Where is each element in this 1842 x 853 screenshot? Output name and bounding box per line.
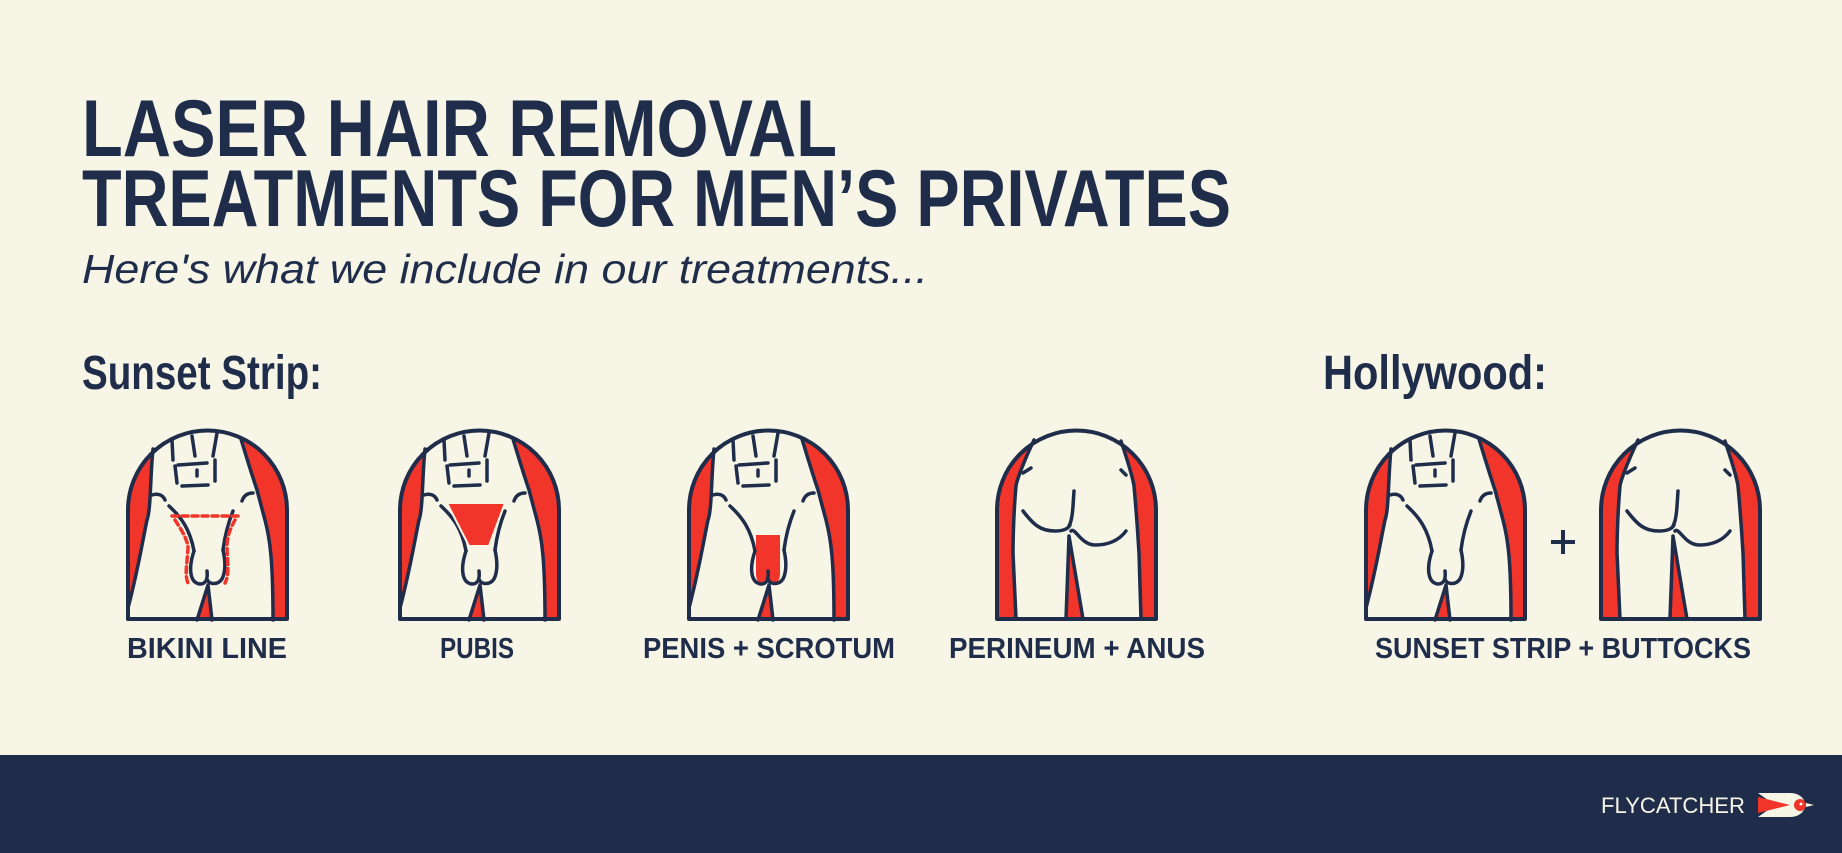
icon: bikini line [126,429,289,620]
title [82,84,1231,244]
label: perineum + anus: PERINEUM + ANUS [949,633,1205,665]
heading: Sunset Strip: Sunset Strip: [82,347,322,400]
subtitle: Here's what we include in our treatments... [82,246,928,292]
label: sunset strip + buttocks: SUNSET STRIP + BUTTOCKS [1375,633,1751,665]
heading: Hollywood: Hollywood: [1323,347,1547,400]
icon: perineum + anus [995,429,1158,620]
title: TREATMENTS FOR MEN’S PRIVATES [82,154,1231,244]
icon: hollywood back [1599,429,1762,620]
icon: penis + scrotum [687,429,850,620]
icon: plus [1551,530,1575,554]
footer bar [0,755,1842,853]
label: pubis: PUBIS [440,633,514,665]
title: LASER HAIR REMOVAL [82,84,837,174]
logo text: FLYCATCHER [1601,793,1745,818]
label: penis + scrotum: PENIS + SCROTUM [643,633,895,665]
icon: bird logo [1758,793,1814,817]
icon: hollywood front [1364,429,1527,620]
icon: pubis [398,429,561,620]
label: bikini line: BIKINI LINE [127,633,287,665]
